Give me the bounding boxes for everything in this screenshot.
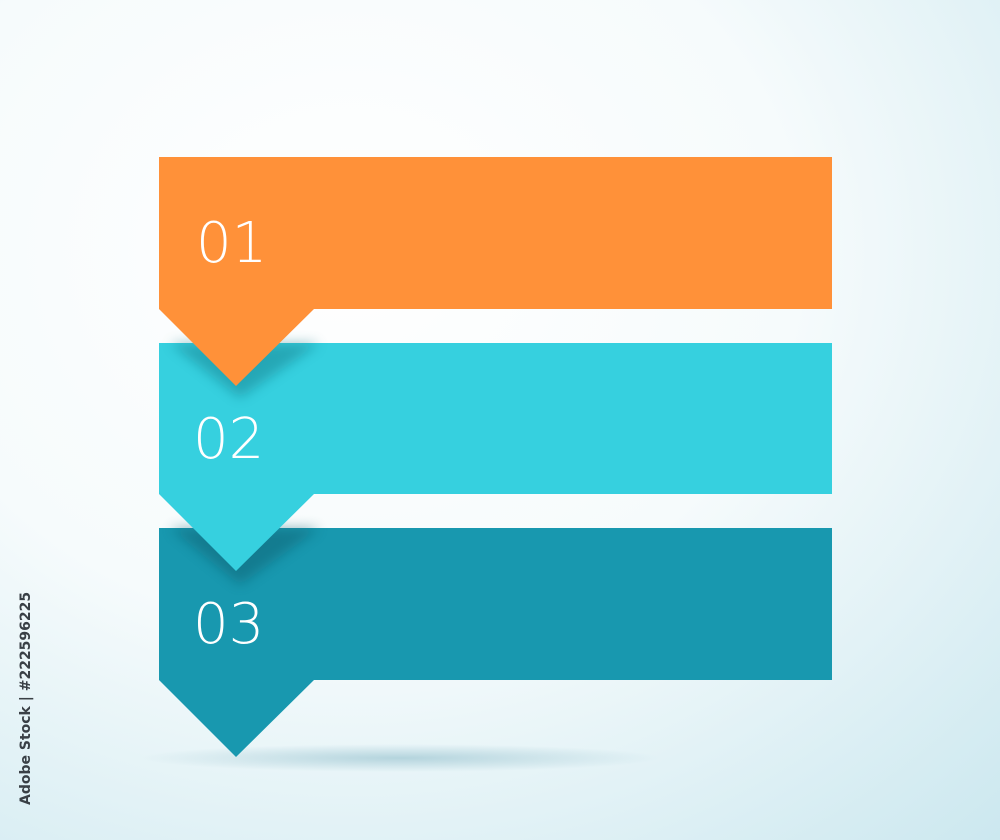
number 03: 03 (193, 592, 264, 657)
number 02: 02 (193, 407, 264, 472)
floor shadow (140, 744, 660, 772)
banner 01 (159, 157, 832, 386)
banner 02 (159, 343, 832, 571)
number 01: 01 (196, 211, 267, 276)
shadow of arrow 1 (170, 343, 320, 398)
shadow of arrow 2 (170, 528, 320, 585)
side watermark text: Adobe Stock | #222596225 (18, 592, 34, 805)
banner 03 (159, 528, 832, 757)
